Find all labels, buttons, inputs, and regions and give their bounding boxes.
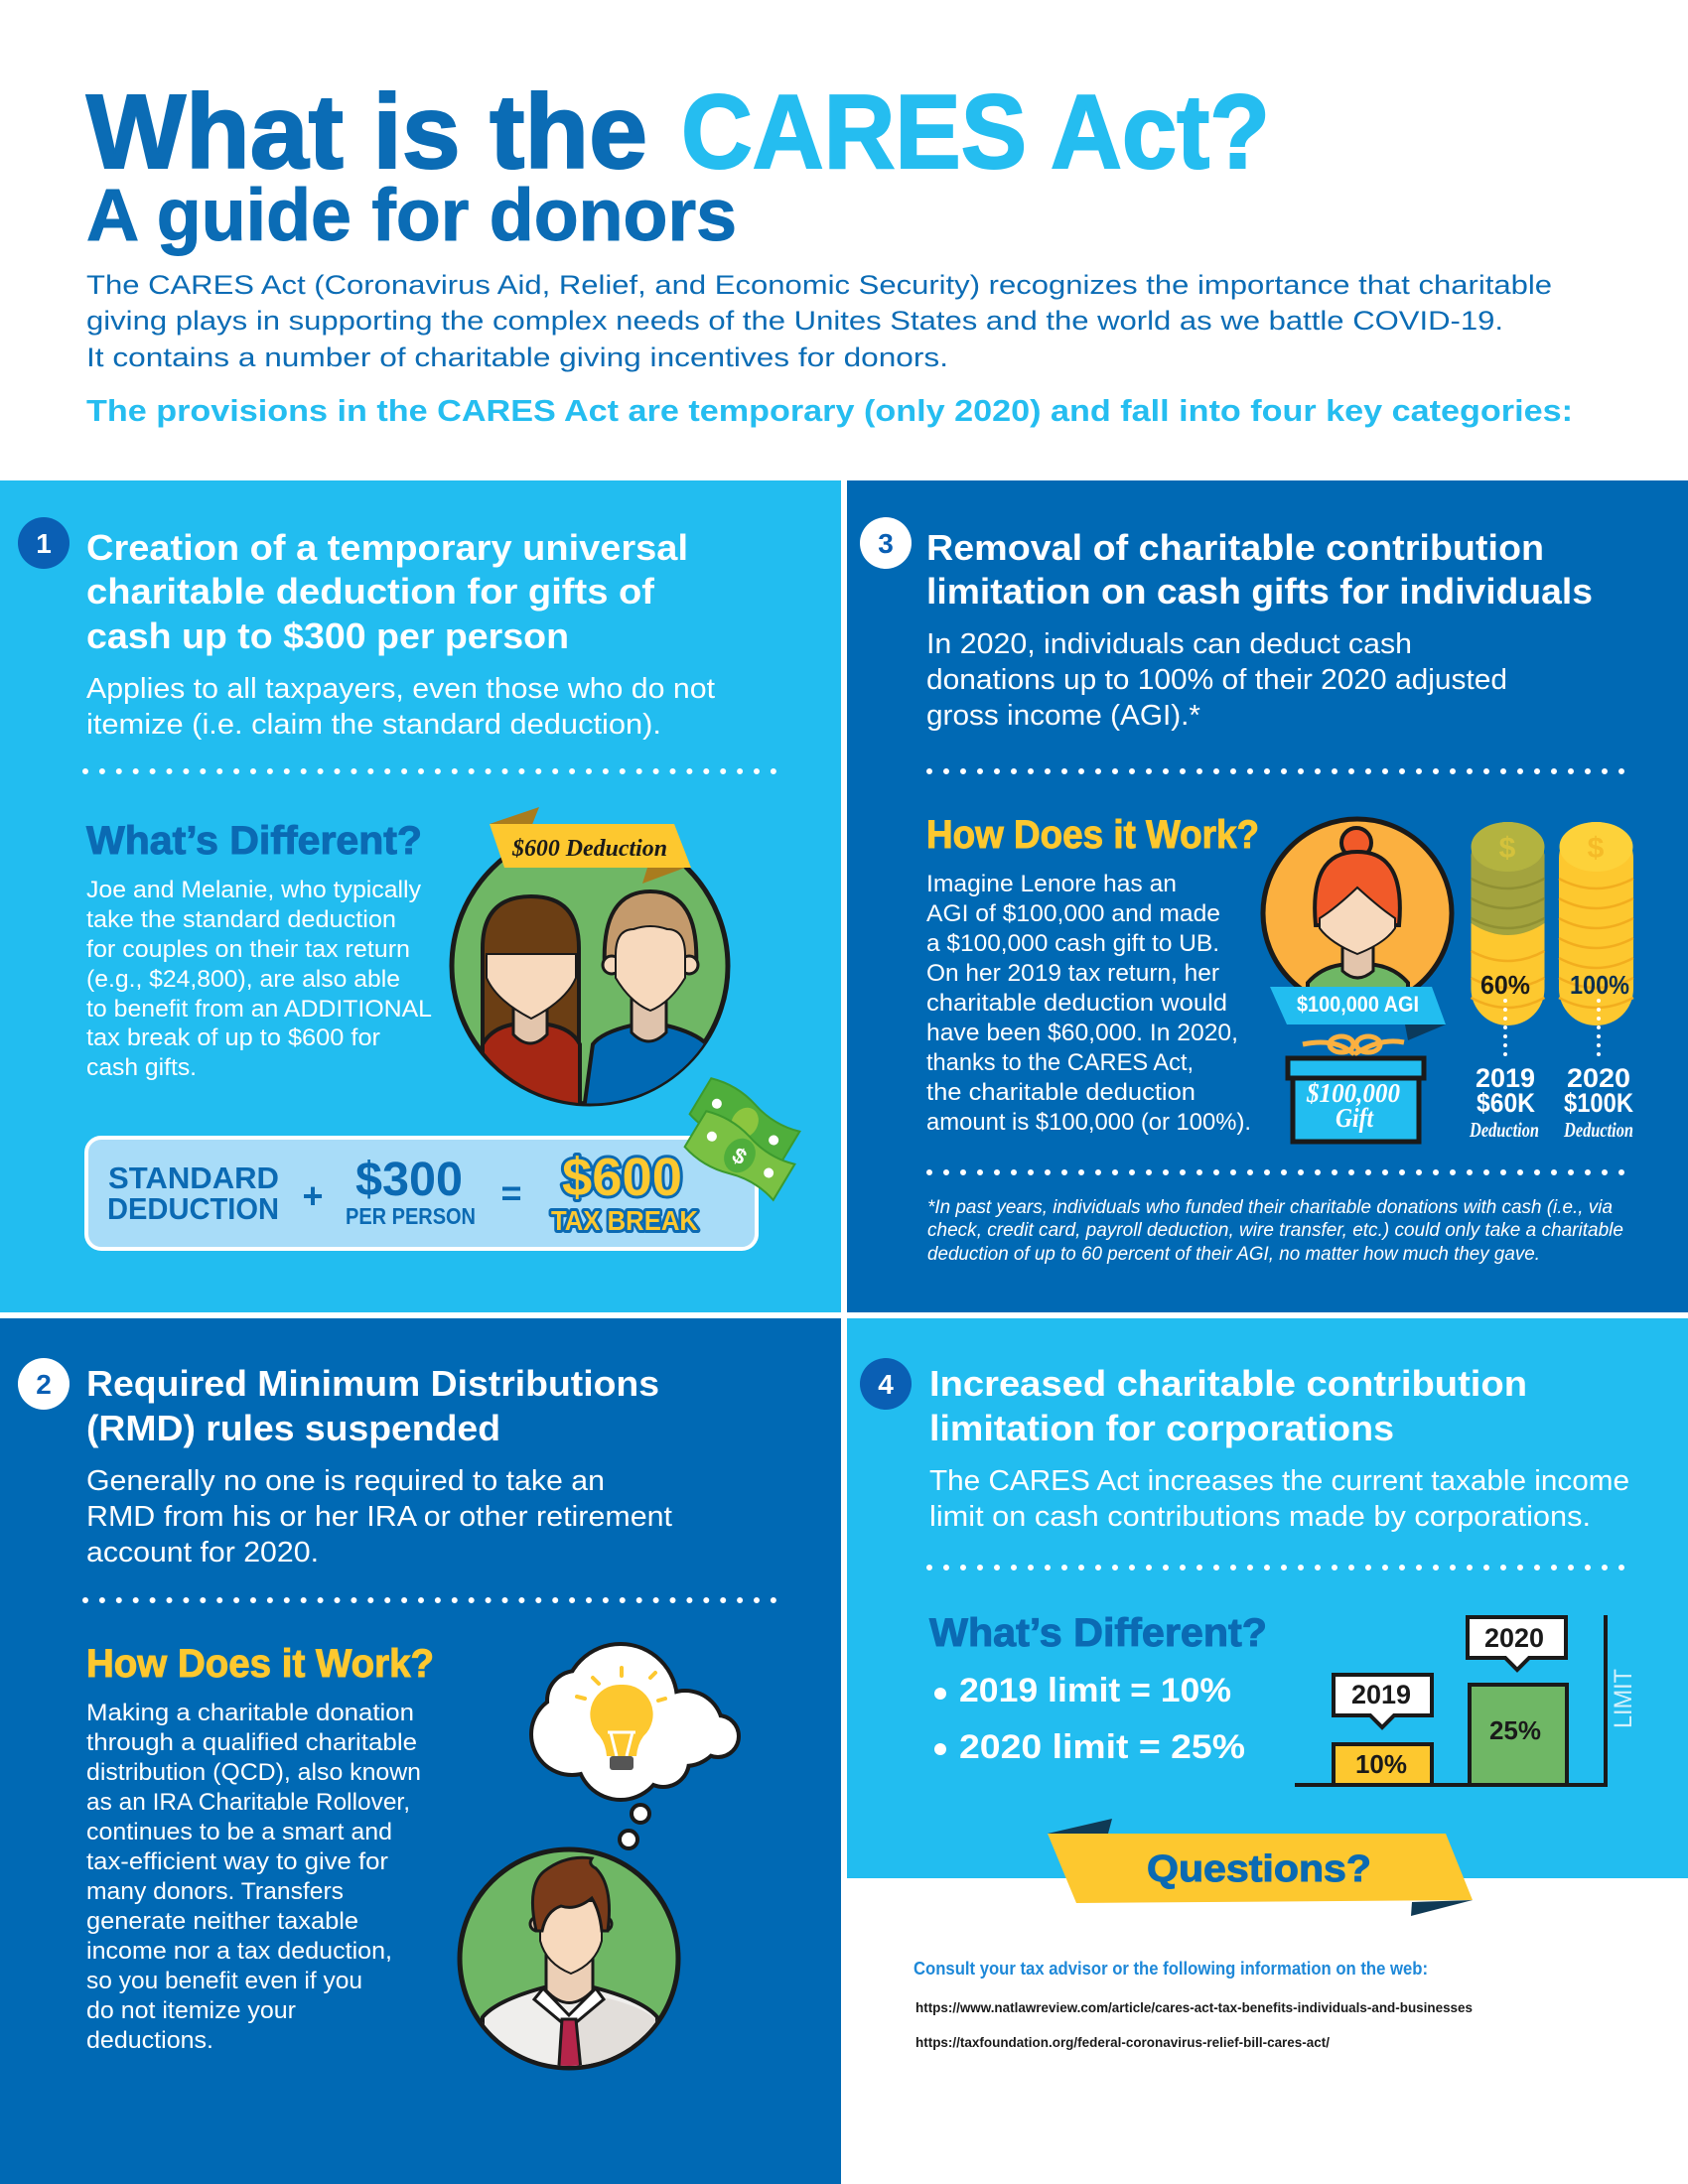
description 4: The CARES Act increases the current taxable income — [929, 1465, 1629, 1497]
body text 2: generate neither taxable — [86, 1908, 358, 1935]
limit bullet list — [934, 1672, 1245, 1766]
icon: light bulb — [577, 1668, 665, 1770]
intro paragraph: giving plays in supporting the complex needs of the Unites States and the world as we battle COVID-19. — [86, 306, 1503, 336]
description 1 — [86, 673, 715, 741]
coin stack: 2019 60% — [1472, 822, 1545, 1025]
body text 2: income nor a tax deduction, — [86, 1938, 392, 1965]
body text 2: through a qualified charitable — [86, 1729, 417, 1756]
body text 2: many donors. Transfers — [86, 1878, 344, 1905]
heading 2: Required Minimum Distributions — [86, 1363, 659, 1404]
number badge 4 — [860, 1358, 912, 1410]
body text 3: thanks to the CARES Act, — [926, 1049, 1194, 1076]
panel 4: corporate limitation — [847, 1318, 1688, 1878]
resources intro: Consult your tax advisor or the following information on the web: — [914, 1959, 1428, 1979]
intro paragraph — [86, 270, 1552, 372]
panel 2: RMD rules suspended — [0, 1318, 841, 2184]
limit bullet list: 2019 limit = 10% — [959, 1672, 1231, 1709]
heading 4 — [929, 1363, 1527, 1448]
heading 3 — [926, 527, 1593, 612]
callout: 2019: 2019 — [1351, 1680, 1411, 1709]
body text 1: to benefit from an ADDITIONAL — [86, 996, 432, 1023]
description 3 — [926, 628, 1507, 732]
body text 2: as an IRA Charitable Rollover, — [86, 1789, 410, 1816]
description 1: Applies to all taxpayers, even those who do not — [86, 673, 715, 705]
footnote: check, credit card, payroll deduction, wire transfer, etc.) could only take a charitable — [927, 1220, 1623, 1241]
description 3: donations up to 100% of their 2020 adjusted — [926, 664, 1507, 696]
illustration: couple portrait — [449, 858, 731, 1106]
banner: questions — [1048, 1819, 1473, 1916]
icon: gift box: $100,000 — [1306, 1078, 1400, 1108]
description 1: itemize (i.e. claim the standard deduction). — [86, 709, 661, 741]
footnote: *In past years, individuals who funded their charitable donations with cash (i.e., via — [927, 1197, 1613, 1218]
body text 3: a $100,000 cash gift to UB. — [926, 930, 1219, 957]
label: 2020 deduction — [1563, 1063, 1633, 1142]
description 2: account for 2020. — [86, 1537, 319, 1569]
axis label: LIMIT — [1610, 1669, 1637, 1728]
body text 3: Imagine Lenore has an — [926, 871, 1177, 897]
body text 1: cash gifts. — [86, 1054, 197, 1081]
label: 2019 deduction — [1469, 1063, 1539, 1142]
coin stack: 2020 100%: $ — [1588, 832, 1605, 865]
number badge 1 — [18, 517, 70, 569]
bar: 2019 10%: 10% — [1355, 1749, 1407, 1779]
label: 2020 deduction: Deduction — [1563, 1118, 1633, 1142]
description 4 — [929, 1465, 1629, 1533]
footnote: deduction of up to 60 percent of their AGI, no matter how much they gave. — [927, 1244, 1540, 1265]
equation box: DEDUCTION — [107, 1191, 279, 1226]
panel 3: removal of contribution limit — [847, 480, 1688, 1312]
description 2 — [86, 1465, 672, 1569]
title: What is the — [86, 73, 647, 191]
body text 3: On her 2019 tax return, her — [926, 960, 1219, 987]
intro paragraph: The CARES Act (Coronavirus Aid, Relief, and Economic Security) recognizes the importance that charitable — [86, 270, 1552, 300]
limit bullet list: 2020 limit = 25% — [959, 1728, 1245, 1766]
coin stack: 2020 100% — [1559, 822, 1633, 1025]
description 3: In 2020, individuals can deduct cash — [926, 628, 1412, 660]
illustration: man portrait — [460, 1849, 678, 2080]
callout: 2020: 2020 — [1484, 1623, 1544, 1653]
body text 3: charitable deduction would — [926, 990, 1227, 1017]
resource link 1: https://www.natlawreview.com/article/cares-act-tax-benefits-individuals-and-businesses — [915, 1999, 1473, 2015]
body text 3: amount is $100,000 (or 100%). — [926, 1109, 1251, 1136]
key categories statement: The provisions in the CARES Act are temporary (only 2020) and fall into four key categories: — [86, 393, 1573, 428]
result: $600 tax break: TAX BREAK — [551, 1205, 698, 1236]
footnote — [927, 1197, 1623, 1265]
heading 2: (RMD) rules suspended — [86, 1408, 500, 1448]
equation box — [86, 1138, 757, 1249]
equation box: $300 — [355, 1154, 463, 1206]
label: 2020 deduction: 2020 — [1567, 1063, 1630, 1093]
bar: 2020 25%: 25% — [1489, 1715, 1541, 1745]
heading 4: Increased charitable contribution — [929, 1363, 1527, 1404]
number badge 3: 3 — [878, 528, 894, 559]
body text 3: AGI of $100,000 and made — [926, 900, 1220, 927]
label: 2019 deduction: 2019 — [1476, 1063, 1535, 1093]
heading 3: limitation on cash gifts for individuals — [926, 571, 1593, 612]
body text 3: have been $60,000. In 2020, — [926, 1020, 1238, 1046]
description 2: RMD from his or her IRA or other retirement — [86, 1501, 672, 1533]
header — [86, 73, 1573, 428]
bar: 2020 25% — [1470, 1685, 1567, 1785]
equation box: = — [500, 1172, 522, 1213]
heading 1: charitable deduction for gifts of — [86, 571, 655, 612]
icon: cash bills — [683, 1075, 801, 1203]
coin stack: 2019 60%: 60% — [1480, 970, 1530, 1000]
banner: $100,000 AGI — [1270, 987, 1446, 1040]
result: $600 tax break — [551, 1148, 698, 1236]
icon: gift box — [1288, 1036, 1424, 1142]
coin stack: 2019 60%: $ — [1499, 832, 1516, 865]
resource link 2: https://taxfoundation.org/federal-coronavirus-relief-bill-cares-act/ — [915, 2034, 1330, 2050]
what's different heading: What’s Different? — [929, 1611, 1267, 1655]
callout: 2020 — [1468, 1617, 1566, 1670]
heading 3: Removal of charitable contribution — [926, 527, 1544, 568]
subtitle: A guide for donors — [86, 174, 737, 256]
banner: $600 deduction: $600 Deduction — [511, 836, 667, 862]
icon: cash bills: $ — [728, 1143, 751, 1169]
description 4: limit on cash contributions made by corporations. — [929, 1501, 1591, 1533]
intro paragraph: It contains a number of charitable giving incentives for donors. — [86, 342, 948, 372]
how does it work heading: How Does it Work? — [926, 813, 1259, 857]
bar: 2019 10% — [1334, 1744, 1432, 1785]
title — [86, 73, 1270, 191]
body text 2: deductions. — [86, 2027, 213, 2054]
label: 2019 deduction: $60K — [1477, 1088, 1535, 1118]
body text 2: distribution (QCD), also known — [86, 1759, 421, 1786]
label: 2020 deduction: $100K — [1564, 1088, 1633, 1118]
equation box: STANDARD — [108, 1160, 279, 1195]
how does it work heading: How Does it Work? — [86, 1642, 434, 1686]
equation box: + — [302, 1175, 324, 1216]
bar chart: 2019 vs 2020 limit — [1295, 1615, 1637, 1785]
result: $600 tax break: $600 — [562, 1148, 682, 1207]
body text 1: tax break of up to $600 for — [86, 1024, 380, 1051]
heading 1: Creation of a temporary universal — [86, 527, 688, 568]
banner: questions: Questions? — [1147, 1848, 1371, 1890]
number badge 3 — [860, 517, 912, 569]
coin stack: 2020 100%: 100% — [1570, 970, 1629, 1000]
heading 1: cash up to $300 per person — [86, 615, 569, 656]
number badge 1: 1 — [36, 528, 52, 559]
body text 3: the charitable deduction — [926, 1079, 1196, 1106]
number badge 4: 4 — [878, 1369, 894, 1400]
description 3: gross income (AGI).* — [926, 700, 1200, 732]
body text 3 — [926, 871, 1251, 1136]
what's different heading: What’s Different? — [86, 819, 422, 863]
heading 2 — [86, 1363, 659, 1448]
body text 2: so you benefit even if you — [86, 1968, 362, 1994]
label: 2019 deduction: Deduction — [1469, 1118, 1539, 1142]
resources block — [914, 1959, 1473, 2050]
body text 1: for couples on their tax return — [86, 936, 410, 963]
body text 2: tax-efficient way to give for — [86, 1848, 388, 1875]
body text 2: continues to be a smart and — [86, 1819, 392, 1845]
banner: $600 deduction — [490, 807, 691, 884]
title: CARES Act? — [681, 73, 1270, 191]
icon: thought cloud with light bulb — [533, 1646, 737, 1848]
description 2: Generally no one is required to take an — [86, 1465, 605, 1497]
callout: 2019 — [1334, 1675, 1432, 1727]
body text 1 — [86, 877, 432, 1081]
number badge 2: 2 — [36, 1369, 52, 1400]
body text 1: take the standard deduction — [86, 906, 396, 933]
body text 1: (e.g., $24,800), are also able — [86, 966, 400, 993]
body text 2: do not itemize your — [86, 1997, 296, 2024]
body text 2: Making a charitable donation — [86, 1700, 414, 1726]
number badge 2 — [18, 1358, 70, 1410]
panel 1: universal charitable deduction — [0, 480, 841, 1312]
heading 4: limitation for corporations — [929, 1408, 1394, 1448]
banner: $100,000 AGI: $100,000 AGI — [1297, 992, 1419, 1017]
body text 1: Joe and Melanie, who typically — [86, 877, 421, 903]
illustration: Lenore portrait — [1263, 819, 1452, 1013]
body text 2 — [86, 1700, 421, 2054]
heading 1 — [86, 527, 688, 656]
icon: gift box: Gift — [1336, 1103, 1374, 1133]
equation box: PER PERSON — [346, 1203, 476, 1229]
